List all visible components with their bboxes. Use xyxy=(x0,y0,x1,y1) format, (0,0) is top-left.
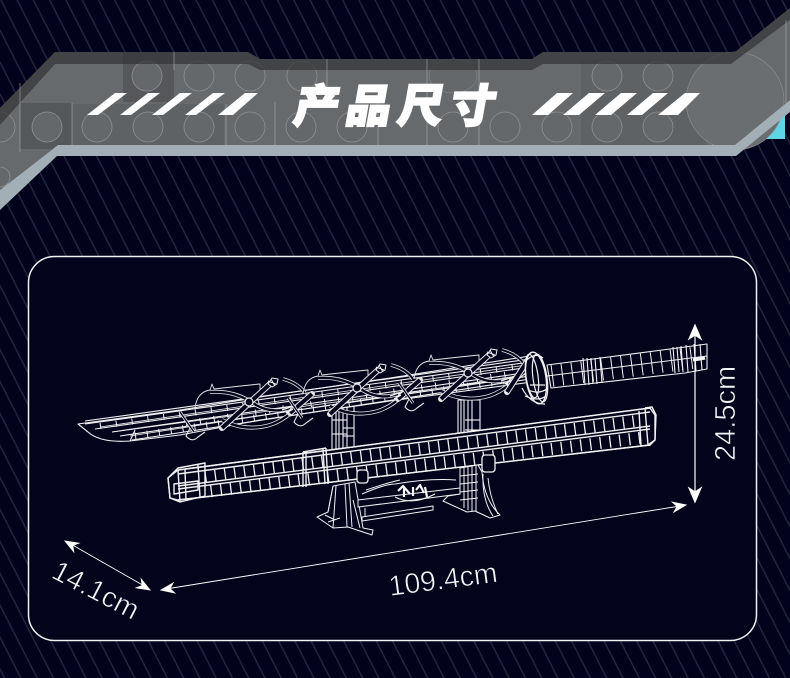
arrow: height xyxy=(689,325,701,502)
cyan corner accent xyxy=(757,113,785,139)
left stripes xyxy=(87,93,258,115)
right stripes xyxy=(532,93,700,115)
banner studs xyxy=(0,52,784,187)
scabbard xyxy=(168,407,656,502)
label: length 109.4cm: 109.4cm xyxy=(387,557,499,603)
arrow: depth xyxy=(62,537,152,594)
label: height 24.5cm: 24.5cm xyxy=(710,366,742,461)
tsuba guard xyxy=(522,351,550,405)
banner top dark band xyxy=(0,8,790,125)
panel: dimensions frame xyxy=(28,256,756,640)
product: wireframe sword and stand xyxy=(78,344,707,535)
stand base and ornament xyxy=(358,480,460,521)
blade xyxy=(78,356,532,441)
title: 产品尺寸 xyxy=(290,70,509,136)
back stand posts xyxy=(332,400,480,450)
banner darker tiles xyxy=(20,52,706,149)
banner tile seams xyxy=(20,20,786,152)
blade wrapping units xyxy=(180,349,531,440)
banner main plate xyxy=(0,8,790,190)
banner: product size header xyxy=(0,8,790,210)
label: depth 14.1cm: 14.1cm xyxy=(47,555,144,626)
handle xyxy=(547,344,707,388)
front stand xyxy=(317,455,500,535)
banner bottom light edge xyxy=(0,100,790,210)
arrow: length xyxy=(160,500,687,595)
